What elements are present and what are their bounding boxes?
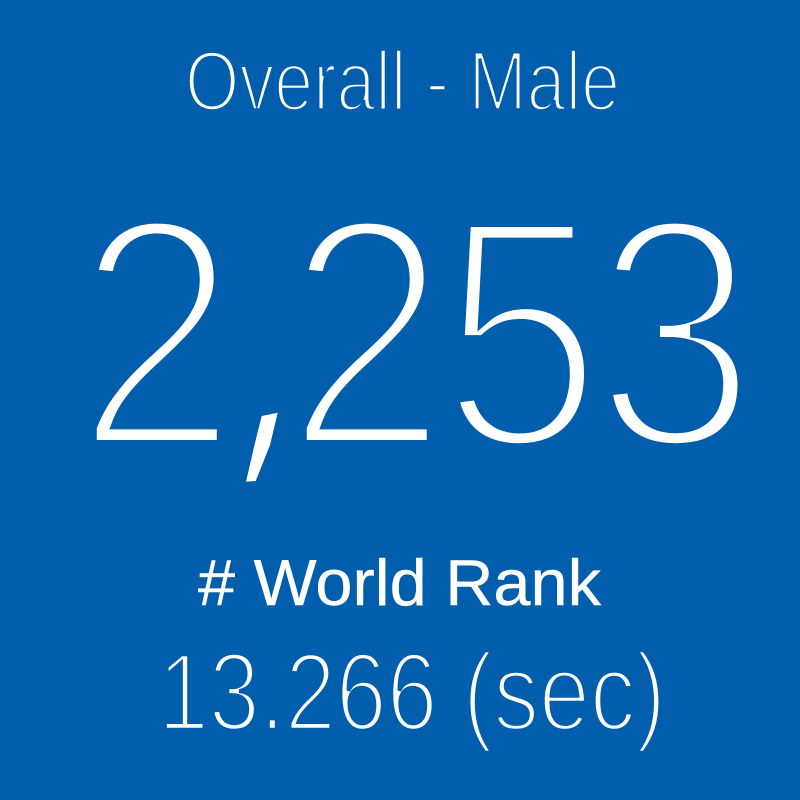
title: Overall - Male: [185, 34, 620, 128]
big number: 2: [286, 149, 448, 517]
big number: 2: [76, 149, 238, 517]
big number: 3: [595, 149, 756, 517]
big number: ,: [257, 386, 272, 453]
big number: [76, 149, 756, 517]
value: time: 13.266 (sec): [158, 631, 666, 754]
big number: 5: [441, 149, 602, 517]
label: world rank: # World Rank: [198, 546, 602, 619]
